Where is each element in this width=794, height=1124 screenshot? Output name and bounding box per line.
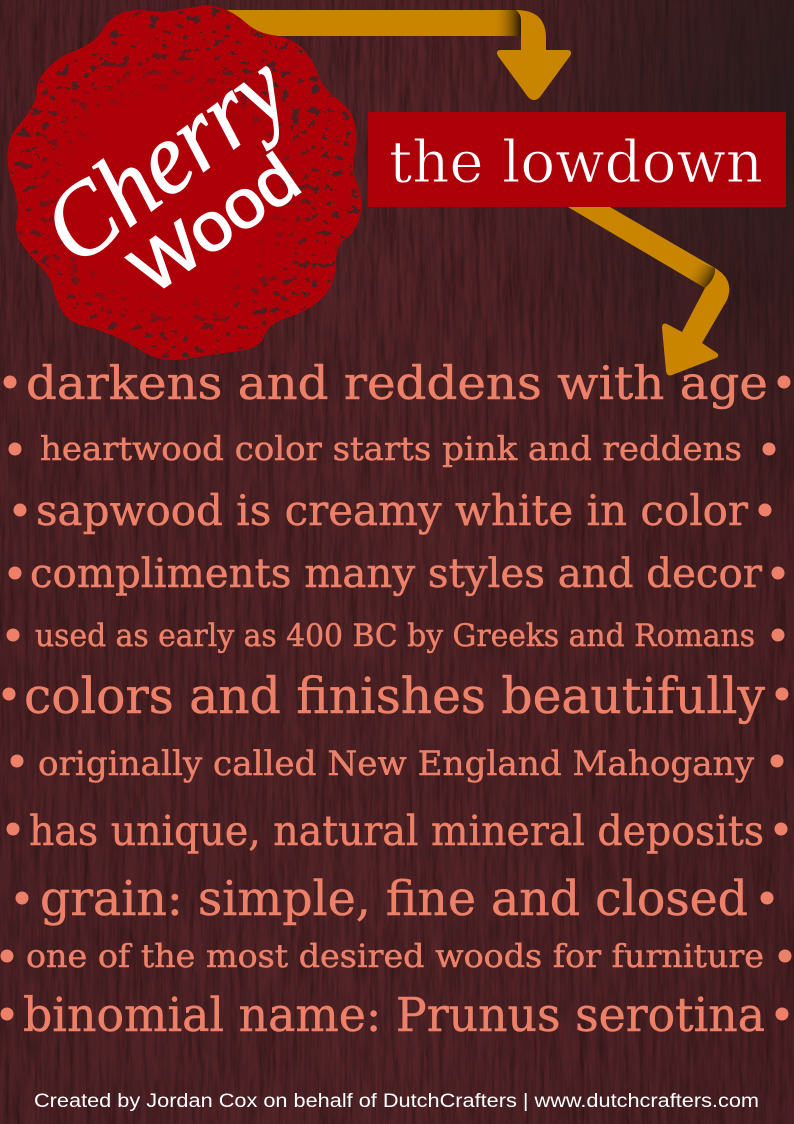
seal text: Cherry: Cherry: [22, 31, 309, 286]
fact: colors and finishes: colors and finishes beautifully: [24, 667, 766, 725]
title banner: the lowdown: [368, 112, 786, 207]
list of cherry wood facts: [0, 356, 792, 1043]
seal badge: Cherry Wood: [7, 5, 362, 360]
footer credit: Created by Jordan Cox on behalf of DutchCrafters | www.dutchcrafters.com: [34, 1090, 759, 1112]
arrow: lower, from title to list: [568, 207, 729, 376]
fact: heartwood: heartwood color starts pink and reddens: [40, 429, 742, 468]
fact: mineral deposits: has unique, natural mineral deposits: [29, 807, 764, 855]
fact: binomial name: binomial name: Prunus serotina: [23, 988, 765, 1043]
title banner: the lowdown: the lowdown: [389, 128, 763, 196]
fact: darkens and reddens: darkens and reddens with age: [26, 356, 768, 410]
fact: grain: grain: simple, fine and closed: [40, 871, 748, 927]
fact: compliments: compliments many styles and decor: [30, 551, 763, 597]
fact: sapwood: sapwood is creamy white in color: [36, 486, 749, 535]
arrow: top, from seal to title: [225, 10, 571, 100]
seal text: Wood: Wood: [117, 139, 313, 308]
fact: New England Mahogany: originally called New England Mahogany: [38, 744, 755, 784]
fact: desired woods: one of the most desired woods for furniture: [26, 937, 764, 975]
fact: early use: used as early as 400 BC by Greeks and Romans: [35, 618, 755, 654]
